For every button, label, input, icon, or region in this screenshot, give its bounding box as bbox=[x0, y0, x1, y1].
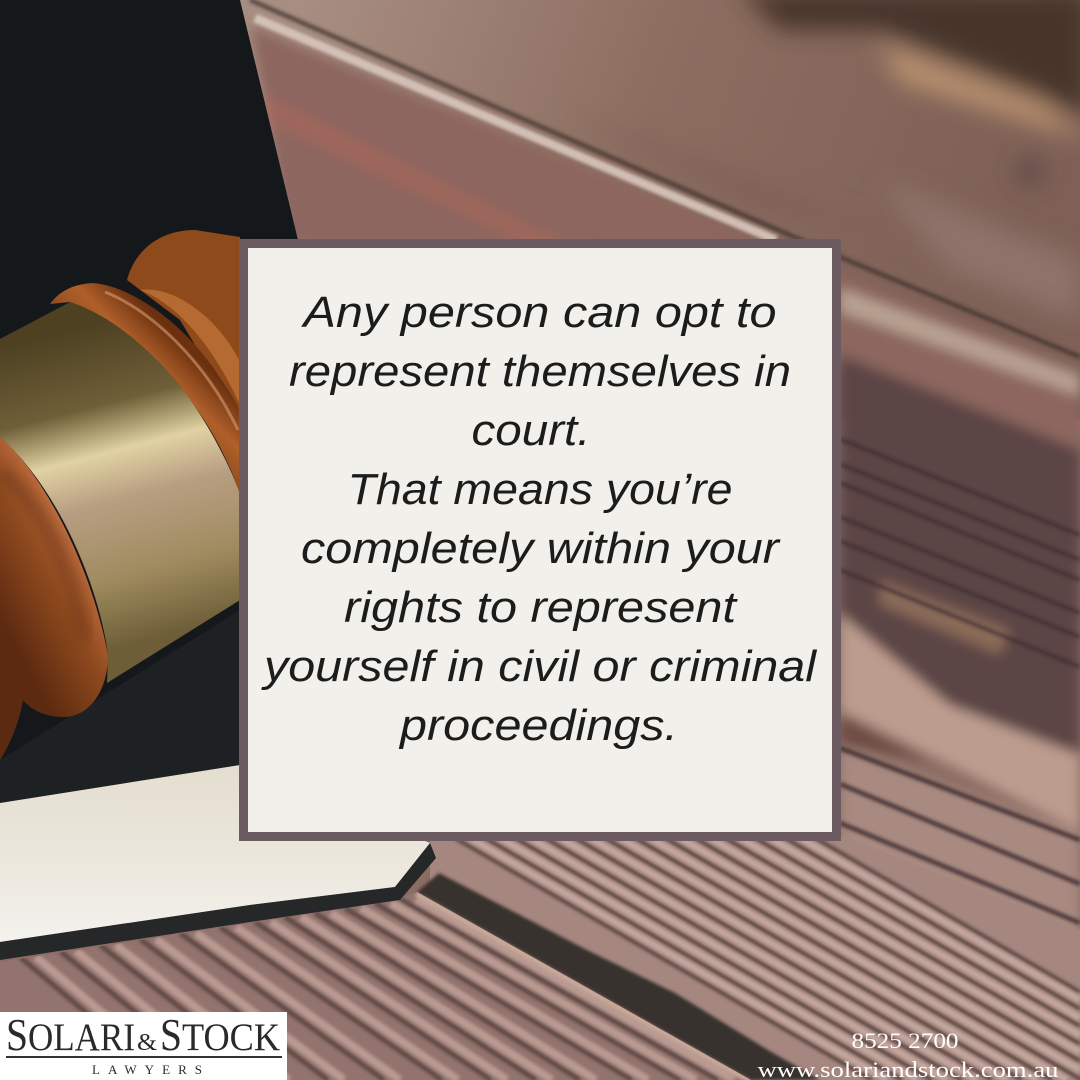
contact details: 8525 2700 bbox=[852, 1028, 958, 1053]
brass band bbox=[0, 302, 240, 683]
gavel near ring behind band bbox=[50, 283, 240, 494]
second plank bbox=[250, 25, 1080, 1000]
gavel near ring bbox=[0, 437, 108, 760]
lower left plank bbox=[0, 880, 760, 1080]
panel message bbox=[261, 288, 817, 750]
panel message: yourself in civil or criminal bbox=[261, 642, 817, 691]
logo: Solari & Stock Lawyers: OLARI bbox=[28, 1016, 135, 1059]
dark plank seam bbox=[417, 873, 820, 1080]
top plank bbox=[240, 0, 1080, 420]
logo: Solari & Stock Lawyers: S bbox=[6, 1009, 28, 1060]
gavel far head bbox=[127, 230, 240, 420]
book: black leather cover and pages bbox=[0, 0, 436, 960]
logo: Solari & Stock Lawyers bbox=[0, 1009, 287, 1080]
panel message: completely within your bbox=[301, 524, 782, 573]
upper seam bbox=[250, 0, 1080, 357]
panel message: rights to represent bbox=[344, 583, 738, 632]
panel message: That means you’re bbox=[348, 465, 732, 514]
logo: Solari & Stock Lawyers: LAWYERS bbox=[92, 1062, 202, 1077]
lower right plank bbox=[425, 835, 1080, 1080]
panel message: proceedings. bbox=[398, 701, 678, 750]
logo: Solari & Stock Lawyers: S bbox=[160, 1009, 182, 1060]
icon: wooden gavel bbox=[0, 230, 240, 760]
logo: Solari & Stock Lawyers: & bbox=[137, 1030, 157, 1056]
panel message: Any person can opt to bbox=[300, 288, 776, 337]
right plank grain bbox=[840, 439, 1080, 980]
panel message: represent themselves in bbox=[289, 347, 791, 396]
panel message: court. bbox=[472, 406, 590, 455]
logo: Solari & Stock Lawyers: TOCK bbox=[182, 1016, 280, 1059]
contact details bbox=[758, 1028, 1058, 1080]
text panel bbox=[244, 244, 836, 836]
